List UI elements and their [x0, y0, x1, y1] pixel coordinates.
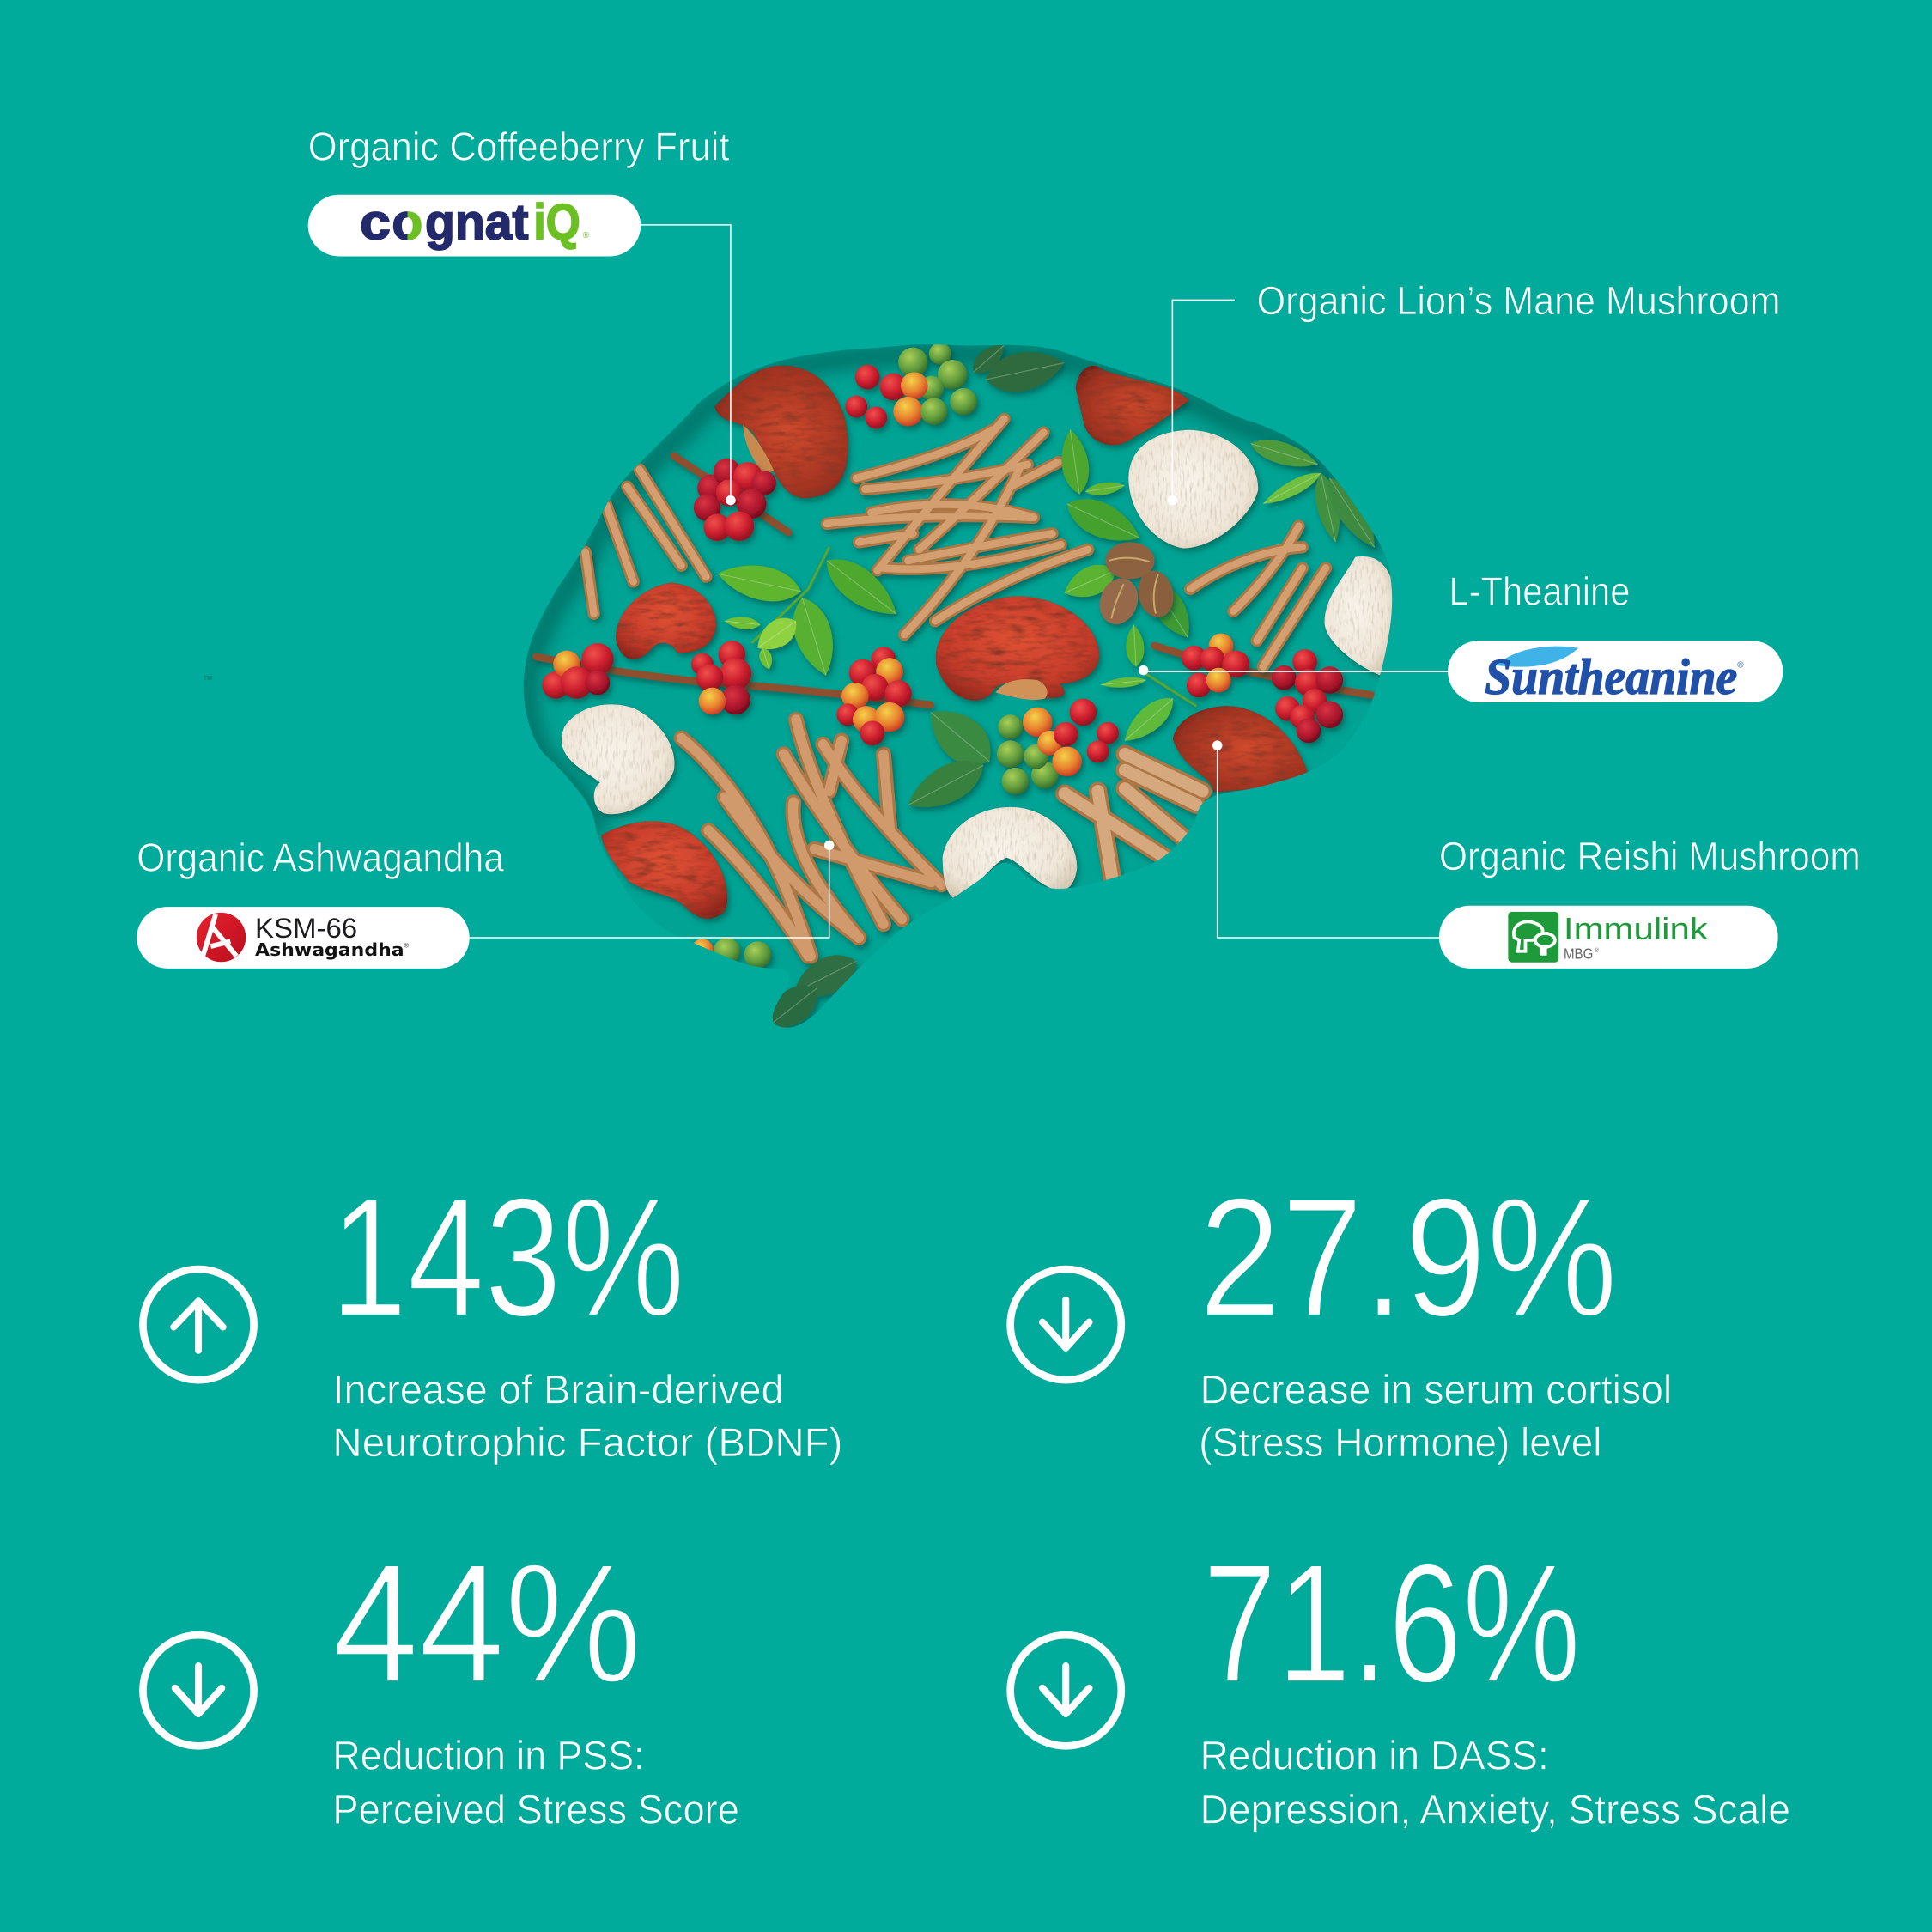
stat: 44% reduction in PSS: 44% — [332, 1528, 642, 1718]
logo pill: KSM-66 Ashwagandha: ® — [404, 942, 410, 949]
stat: 143% increase of BDNF — [143, 1163, 843, 1466]
connector: Immulink to reishi — [1212, 740, 1439, 938]
lion's mane mushrooms — [562, 430, 1394, 900]
ashwagandha roots — [586, 419, 1326, 957]
label: Organic Reishi Mushroom: Organic Reishi Mushroom — [1439, 834, 1861, 878]
icon: Immulink mushrooms — [1508, 912, 1558, 963]
stat: 27.9% decrease in cortisol: 27.9% — [1199, 1163, 1618, 1352]
logo pill: cognatiQ: c — [360, 194, 391, 250]
coffee beans — [1093, 542, 1177, 629]
logo pill: Suntheanine: ® — [1737, 661, 1744, 671]
connector: Suntheanine — [1139, 665, 1448, 675]
coffee branches — [536, 456, 1371, 705]
stat: 44% reduction in PSS — [143, 1528, 739, 1833]
connector: cognatiQ to coffeeberry — [641, 225, 736, 505]
connector: KSM-66 to ashwagandha — [470, 841, 834, 938]
logo pill: Suntheanine — [1448, 641, 1783, 705]
brain illustration — [518, 338, 1399, 1041]
stat: 143% increase of BDNF: Increase of Brain-derived — [332, 1367, 784, 1413]
icon: down arrow circle — [1011, 1635, 1121, 1746]
label: L-Theanine: L-Theanine — [1449, 569, 1630, 614]
logo pill: Immulink MBG: Immulink — [1564, 912, 1708, 946]
logo pill: cognatiQ: ® — [583, 231, 590, 240]
logo pill: Immulink MBG: MBG — [1564, 945, 1593, 962]
logo pill: Suntheanine: Suntheanine — [1485, 649, 1737, 705]
logo pill: Immulink MBG: ® — [1595, 947, 1600, 954]
brain inner shadow — [527, 353, 1382, 833]
label: Organic Coffeeberry Fruit: Organic Coffeeberry Fruit — [308, 125, 730, 169]
stat: 71.6% reduction in DASS: Reduction in DASS: — [1200, 1734, 1549, 1779]
stat: 143% increase of BDNF: Neurotrophic Factor (BDNF) — [332, 1420, 843, 1466]
stat: 71.6% reduction in DASS — [1011, 1528, 1790, 1833]
stat: 27.9% decrease in cortisol: (Stress Hormone) level — [1199, 1420, 1601, 1466]
icon: KSM-66 emblem — [197, 913, 246, 962]
coffee berry clusters — [542, 343, 1343, 969]
reishi mushrooms — [601, 366, 1309, 919]
icon: down arrow circle — [1011, 1269, 1121, 1380]
icon: down arrow circle — [143, 1635, 254, 1746]
stat: 44% reduction in PSS: Reduction in PSS: — [332, 1734, 644, 1779]
brain cut-out backdrop — [518, 339, 1399, 1035]
icon: up arrow circle — [143, 1269, 254, 1380]
stat: 27.9% decrease in cortisol — [1011, 1163, 1672, 1466]
logo pill: cognatiQ: gnat — [425, 194, 529, 250]
logo pill: cognatiQ: iQ — [533, 194, 580, 250]
logo pill: KSM-66 Ashwagandha — [137, 907, 470, 969]
green leaves — [714, 338, 1386, 1041]
logo pill: KSM-66 Ashwagandha: KSM-66 — [255, 913, 357, 944]
stat: 27.9% decrease in cortisol: Decrease in serum cortisol — [1200, 1367, 1672, 1413]
label: Organic Lion's Mane Mushroom: Organic Lion’s Mane Mushroom — [1257, 278, 1781, 323]
stat: 143% increase of BDNF: 143% — [331, 1163, 685, 1352]
stat: 71.6% reduction in DASS: 71.6% — [1203, 1528, 1581, 1718]
stat: 44% reduction in PSS: Perceived Stress Score — [332, 1788, 739, 1833]
connector: lion's mane — [1168, 300, 1235, 505]
trademark mark: TM — [204, 675, 212, 682]
logo pill: Immulink MBG — [1439, 906, 1778, 969]
logo pill: cognatiQ: o — [392, 194, 422, 250]
logo pill: cognatiQ — [308, 194, 641, 256]
stat: 71.6% reduction in DASS: Depression, Anxiety, Stress Scale — [1200, 1788, 1790, 1833]
label: Organic Ashwagandha: Organic Ashwagandha — [137, 835, 504, 880]
logo pill: KSM-66 Ashwagandha: Ashwagandha — [255, 939, 404, 960]
